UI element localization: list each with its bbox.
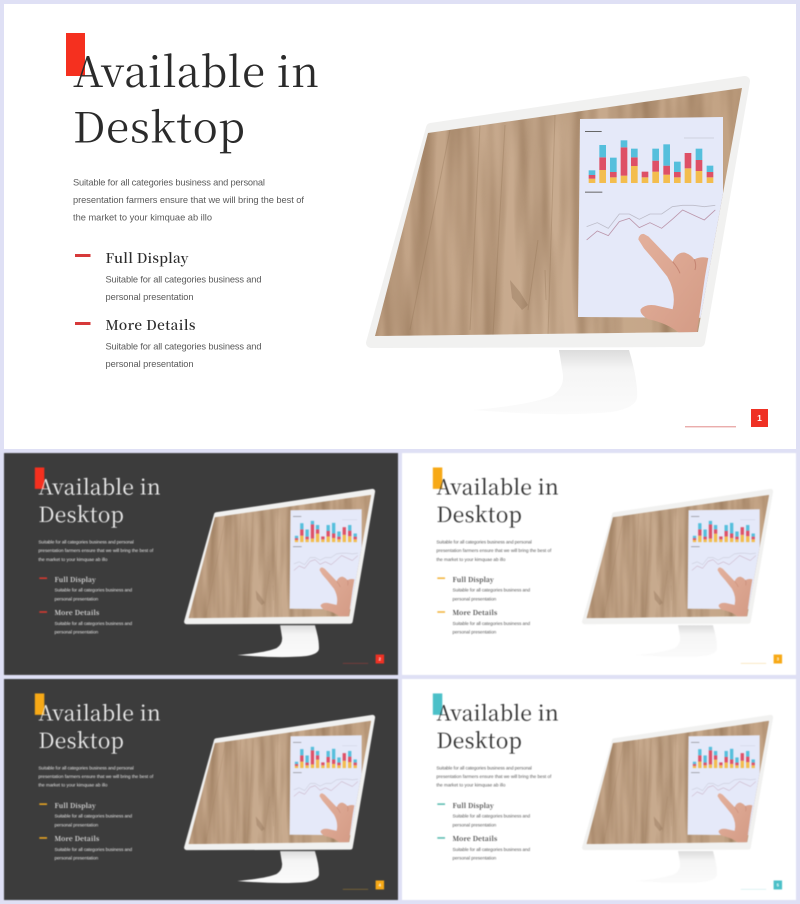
title: Desktop — [38, 724, 124, 754]
feature: More Details — [75, 314, 262, 369]
intro text: Suitable for all categories business and personal — [38, 539, 134, 544]
monitor image — [186, 717, 373, 883]
title: Desktop — [73, 96, 245, 156]
panel: slide 1 white red — [4, 4, 796, 449]
feature: Full Display: Full Display — [106, 247, 189, 267]
page number: 1 — [757, 413, 762, 423]
panel: slide 4 dark orange — [3, 678, 399, 901]
panel: slide 2 dark red — [3, 452, 399, 676]
feature: More Details — [39, 833, 133, 861]
intro text — [436, 765, 552, 788]
title — [436, 696, 559, 754]
accent tab — [35, 467, 44, 489]
feature: Full Display: personal presentation — [54, 822, 99, 827]
title — [38, 696, 161, 754]
title: Available in — [73, 40, 319, 100]
feature: More Details: Suitable for all categories business and — [452, 847, 531, 852]
intro text: Suitable for all categories business and personal — [436, 539, 532, 544]
feature: Full Display: Full Display — [54, 800, 96, 810]
accent tab — [433, 467, 442, 489]
page number — [741, 880, 782, 890]
page number: 5 — [777, 882, 780, 887]
page number: 4 — [379, 882, 382, 887]
title: Desktop — [38, 498, 124, 528]
feature: Full Display — [39, 574, 133, 601]
feature: More Details: Suitable for all categories business and — [106, 342, 262, 352]
panel: slide 5 white teal — [402, 678, 796, 900]
intro text: the market to your kimquae ab illo — [436, 557, 506, 562]
slide background — [402, 453, 796, 675]
monitor image — [584, 491, 771, 657]
slide background — [4, 4, 796, 449]
page number — [685, 409, 768, 427]
feature: Full Display — [75, 247, 262, 302]
title: Available in — [38, 470, 161, 500]
feature: More Details: More Details — [106, 314, 196, 334]
page number — [343, 655, 384, 664]
feature: More Details: More Details — [54, 833, 99, 843]
page number: 2 — [379, 657, 382, 662]
intro text: Suitable for all categories business and personal — [73, 178, 265, 188]
title — [73, 40, 319, 156]
intro text: the market to your kimquae ab illo — [38, 557, 108, 562]
feature: Full Display: Suitable for all categories business and — [54, 588, 133, 593]
feature: More Details: personal presentation — [106, 359, 194, 369]
accent tab — [433, 693, 442, 715]
intro text: Suitable for all categories business and personal — [38, 765, 134, 770]
slide background — [4, 453, 398, 675]
title: Available in — [38, 696, 161, 726]
feature: Full Display: Full Display — [452, 574, 494, 584]
page number: 3 — [777, 657, 780, 662]
monitor image — [186, 491, 373, 657]
title: Desktop — [436, 498, 522, 528]
feature: More Details: personal presentation — [54, 856, 99, 861]
title — [436, 470, 559, 528]
feature: More Details: More Details — [452, 833, 497, 843]
panel: slide 3 white orange — [402, 452, 796, 676]
feature: More Details: More Details — [452, 607, 497, 617]
feature: Full Display: Suitable for all categories business and — [106, 274, 262, 284]
intro text — [73, 178, 304, 222]
accent tab — [66, 33, 85, 76]
feature: More Details: personal presentation — [452, 630, 497, 635]
title: Available in — [436, 696, 559, 726]
title — [38, 470, 161, 528]
feature: More Details — [437, 833, 531, 861]
title: Desktop — [436, 724, 522, 754]
feature: More Details — [39, 607, 133, 635]
intro text: the market to your kimquae ab illo — [436, 783, 506, 788]
feature: Full Display — [437, 800, 531, 827]
intro text: presentation farmers ensure that we will bring the best of — [436, 548, 552, 553]
feature: Full Display: personal presentation — [452, 596, 497, 601]
slide background — [4, 679, 398, 900]
intro text — [38, 765, 154, 788]
feature: More Details — [437, 607, 531, 635]
feature: More Details: More Details — [54, 607, 99, 617]
intro text: presentation farmers ensure that we will bring the best of — [38, 774, 154, 779]
monitor image — [584, 717, 771, 883]
feature: More Details: Suitable for all categories business and — [54, 621, 133, 626]
feature: Full Display — [39, 800, 133, 827]
intro text: the market to your kimquae ab illo — [73, 212, 212, 222]
intro text: Suitable for all categories business and personal — [436, 765, 532, 770]
feature: Full Display: Full Display — [54, 574, 96, 584]
intro text: the market to your kimquae ab illo — [38, 783, 108, 788]
feature: Full Display: personal presentation — [452, 822, 497, 827]
feature: More Details: personal presentation — [452, 856, 497, 861]
feature: Full Display: Suitable for all categories business and — [54, 814, 133, 819]
intro text: presentation farmers ensure that we will bring the best of — [436, 774, 552, 779]
feature: More Details: Suitable for all categories business and — [452, 621, 531, 626]
feature: More Details: Suitable for all categories business and — [54, 847, 133, 852]
title: Available in — [436, 470, 559, 500]
accent tab — [35, 693, 44, 715]
intro text — [436, 539, 552, 562]
feature: Full Display: personal presentation — [106, 292, 194, 302]
feature: Full Display: personal presentation — [54, 596, 99, 601]
intro text: presentation farmers ensure that we will bring the best of — [73, 195, 304, 205]
monitor image — [370, 81, 745, 414]
feature: Full Display: Full Display — [452, 800, 494, 810]
page number — [343, 880, 384, 890]
feature: Full Display: Suitable for all categories business and — [452, 814, 531, 819]
feature: Full Display — [437, 574, 531, 601]
intro text: presentation farmers ensure that we will bring the best of — [38, 548, 154, 553]
slide background — [402, 679, 796, 900]
intro text — [38, 539, 154, 562]
feature: More Details: personal presentation — [54, 630, 99, 635]
feature: Full Display: Suitable for all categories business and — [452, 588, 531, 593]
page number — [741, 655, 782, 664]
